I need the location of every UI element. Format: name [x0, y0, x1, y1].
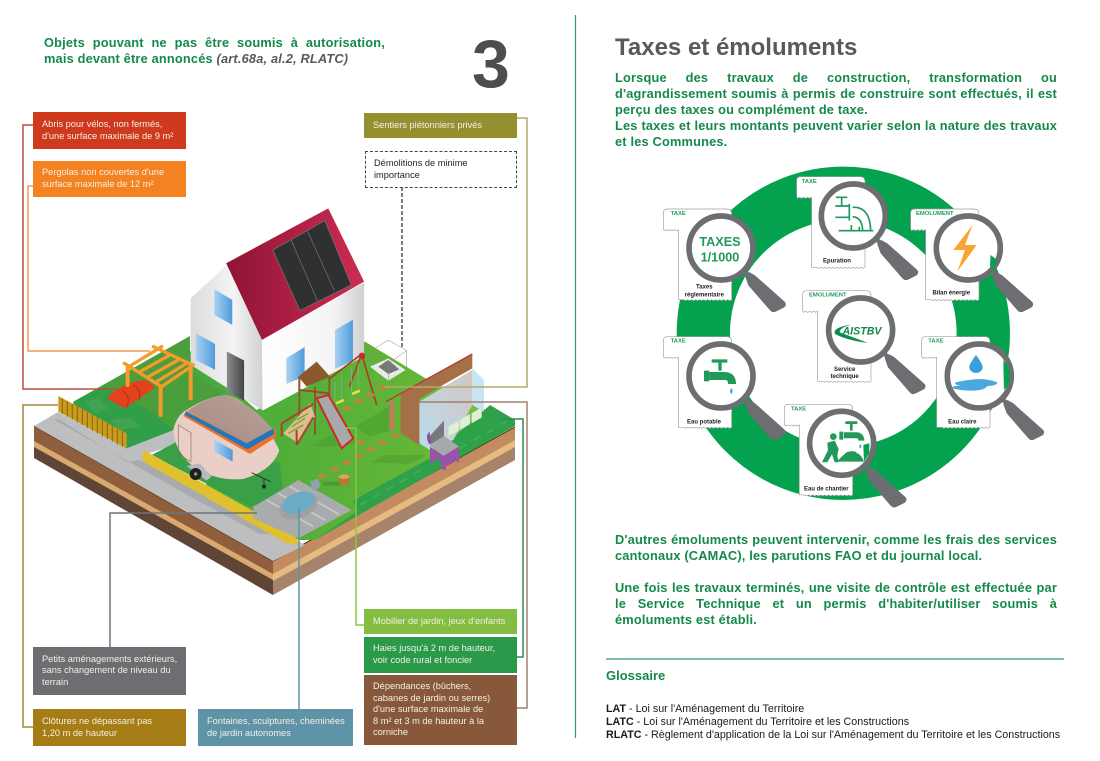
label: Haies: voir code rural et foncier — [373, 655, 472, 665]
text: autres émoluments: D'autres émoluments peuvent intervenir, comme les frais des services — [615, 532, 1057, 547]
curb — [142, 451, 300, 545]
label: Petits aménagements: terrain — [42, 677, 68, 687]
card: Eau de chantier: TAXE — [791, 407, 806, 413]
woodshed — [386, 354, 472, 445]
card: Service technique — [803, 291, 925, 394]
text: autres émoluments: cantonaux (CAMAC), les parutions FAO et du journal local. — [615, 548, 982, 563]
glossary heading: Glossaire — [606, 668, 665, 683]
diagram: taxes ring — [663, 177, 1044, 507]
road — [34, 398, 305, 561]
card: Epuration — [797, 177, 918, 280]
connector: Fontaines — [298, 508, 300, 709]
connector: Pergolas — [28, 186, 150, 351]
card: Taxes réglementaire — [663, 209, 786, 312]
playground — [282, 353, 377, 448]
card: Eau claire: Eau claire — [948, 419, 977, 425]
label: Abris pour vélos: Abris pour vélos, non fermés, — [42, 119, 162, 129]
card: Bilan énergie: EMOLUMENT — [916, 211, 954, 217]
label: Dépendances: corniche — [373, 727, 408, 737]
solar panel — [273, 221, 351, 311]
hedge — [315, 405, 515, 540]
label: Clôtures: 1,20 m de hauteur — [42, 728, 117, 738]
caravan — [173, 395, 279, 489]
connector: Mobilier de jardin — [345, 428, 364, 625]
card: Bilan énergie: Bilan énergie — [933, 291, 971, 297]
label: Dépendances: cabanes de jardin ou serres) — [373, 693, 490, 703]
connector: Dépendances — [419, 402, 527, 708]
vertical divider — [574, 15, 576, 738]
label: Pergolas: surface maximale de 12 m² — [42, 179, 154, 189]
label: Sentiers piétonniers: Sentiers piétonniers privés — [373, 120, 482, 130]
stepping path — [316, 384, 401, 479]
card: Service technique: Service — [834, 367, 856, 373]
label: Dépendances: 8 m² et 3 m de hauteur à la — [373, 716, 484, 726]
card: Taxes réglementaire: TAXES — [699, 235, 741, 249]
text: introduction: d'agrandissement soumis à permis de construire sont effectués, il est — [615, 86, 1057, 101]
label: Pergolas — [33, 161, 186, 197]
text: introduction: et les Communes. — [615, 134, 727, 149]
pergola — [124, 347, 193, 415]
text: visite de contrôle: émoluments est établi. — [615, 612, 757, 627]
bike shelter — [107, 380, 154, 408]
card: Taxes réglementaire: réglementaire — [685, 292, 725, 298]
heading: taxes et émoluments: Taxes et émoluments — [615, 34, 857, 61]
card: Service technique: AISTBV — [841, 325, 882, 337]
card: Epuration: TAXE — [802, 179, 817, 185]
glossary list — [606, 703, 1060, 741]
label: Dépendances: Dépendances (bûchers, — [373, 681, 471, 691]
label: Petits aménagements: Petits aménagements extérieurs, — [42, 654, 177, 664]
label: Sentiers piétonniers — [364, 113, 517, 138]
card: Eau potable: TAXE — [671, 339, 686, 345]
connector: Sentiers piétonniers — [385, 118, 527, 387]
label: Fontaines: Fontaines, sculptures, cheminées — [207, 716, 345, 726]
green ring — [703, 193, 983, 473]
label: Dépendances: d'une surface maximale de — [373, 704, 483, 714]
lawn — [183, 342, 515, 540]
label: Petits aménagements — [33, 647, 186, 695]
house — [191, 208, 364, 410]
label: Haies — [364, 637, 517, 673]
text: introduction: Les taxes et leurs montants peuvent varier selon la nature des travaux — [615, 118, 1057, 133]
connector: Démolitions — [401, 187, 403, 348]
heading: objets à annoncer: mais devant être annoncés (art.68a, al.2, RLATC) — [44, 51, 348, 66]
label: Mobilier de jardin — [364, 609, 517, 634]
lawn shadows — [310, 405, 427, 464]
card: Taxes réglementaire: 1/1000 — [701, 250, 739, 264]
card: Epuration: Epuration — [823, 259, 851, 265]
greenhouse — [419, 368, 484, 450]
label: Démolitions: Démolitions de minime — [374, 158, 468, 168]
text: visite de contrôle: Une fois les travaux terminés, une visite de contrôle est effectuée par — [615, 580, 1057, 595]
label: Mobilier de jardin: Mobilier de jardin, jeux d'enfants — [373, 616, 505, 626]
glossary divider — [606, 658, 1064, 660]
garden — [73, 336, 225, 448]
text: autres émoluments — [615, 532, 1057, 563]
card: Eau de chantier — [784, 404, 906, 507]
barbecue — [427, 421, 459, 471]
card: Service technique: technique — [831, 374, 859, 380]
text: visite de contrôle: le Service Technique et un permis d'habiter/utiliser soumis à — [615, 596, 1057, 611]
card: Service technique: EMOLUMENT — [809, 292, 847, 298]
label: Haies: Haies jusqu'à 2 m de hauteur, — [373, 643, 495, 653]
label: Fontaines — [198, 709, 353, 746]
connector: Clôtures — [23, 405, 58, 727]
text: introduction: perçu des taxes ou complément de taxe. — [615, 102, 868, 117]
text: introduction — [615, 70, 1057, 149]
tree stump — [323, 474, 349, 486]
label: Clôtures — [33, 709, 186, 746]
card: Bilan énergie — [911, 209, 1033, 312]
card: Eau claire: TAXE — [928, 339, 944, 345]
card: Eau potable: Eau potable — [687, 419, 722, 425]
label: Démolitions: importance — [374, 170, 420, 180]
label: Pergolas: Pergolas non couvertes d'une — [42, 167, 164, 177]
soil layers — [34, 426, 515, 595]
fence — [58, 396, 127, 448]
card: Eau claire — [922, 337, 1044, 440]
glossary list: RLATC - Règlement d'application de la Loi sur l'Aménagement du Territoire et les Constructions — [606, 729, 1060, 741]
page number: 3 — [472, 26, 510, 102]
heading: objets à annoncer — [44, 35, 385, 66]
demolition pit — [370, 340, 407, 381]
card: Taxes réglementaire: TAXE — [671, 211, 686, 217]
text: visite de contrôle — [615, 580, 1057, 627]
label: Abris pour vélos: d'une surface maximale de 9 m² — [42, 130, 173, 140]
label: Abris pour vélos — [33, 112, 186, 149]
label: Clôtures: Clôtures ne dépassant pas — [42, 716, 152, 726]
card: Eau potable — [663, 337, 786, 440]
heading: objets à annoncer: Objets pouvant ne pas être soumis à autorisation, — [44, 35, 385, 50]
connector: Abris pour vélos — [23, 125, 117, 389]
caravan lawn — [152, 440, 283, 507]
card: Eau de chantier: Eau de chantier — [804, 486, 849, 492]
label: Petits aménagements: sans changement de niveau du — [42, 665, 171, 675]
label: Dépendances — [364, 675, 517, 745]
glossary list: LAT - Loi sur l'Aménagement du Territoire — [606, 703, 804, 715]
text: introduction: Lorsque des travaux de construction, transformation ou — [615, 70, 1057, 85]
card: Taxes réglementaire: Taxes — [696, 284, 713, 290]
terrace and fountain — [253, 478, 352, 538]
connector: Haies — [500, 419, 523, 657]
label: Démolitions — [365, 151, 517, 188]
label: Fontaines: de jardin autonomes — [207, 728, 291, 738]
connector: Petits aménagements — [110, 513, 257, 647]
glossary list: LATC - Loi sur l'Aménagement du Territoire et les Constructions — [606, 716, 909, 728]
